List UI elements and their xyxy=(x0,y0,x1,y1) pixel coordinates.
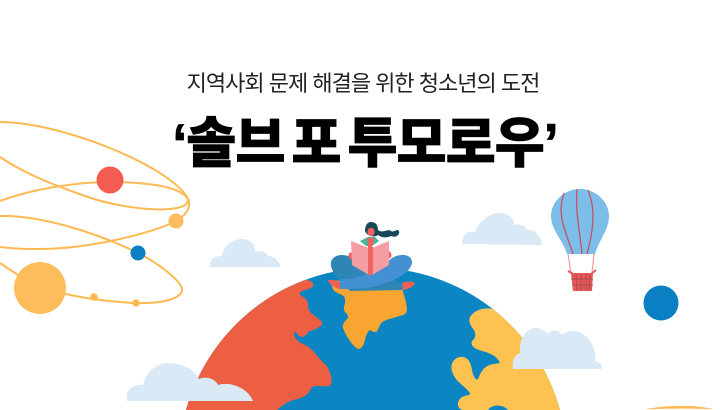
moon: left xyxy=(90,293,98,301)
book xyxy=(351,241,369,275)
balloon envelope xyxy=(551,189,609,254)
planet: red xyxy=(96,166,124,194)
feet xyxy=(328,280,340,289)
cloud: on globe left xyxy=(127,363,253,401)
balloon basket xyxy=(571,273,593,291)
circle: blue right xyxy=(644,286,678,320)
continent: orange xyxy=(332,280,407,349)
balloon ropes and gap xyxy=(569,254,593,272)
orbits and planets xyxy=(0,122,189,314)
hair xyxy=(365,222,399,237)
continent: yellow xyxy=(451,308,560,410)
hot air balloon xyxy=(551,189,609,291)
reading girl xyxy=(328,222,415,291)
title: ‘솔브 포 투모로우’ xyxy=(172,113,558,174)
cloud: upper right xyxy=(462,213,542,245)
cloud: middle left xyxy=(210,239,280,267)
globe xyxy=(186,270,560,410)
left leg xyxy=(331,255,402,291)
face xyxy=(367,228,375,236)
planet: small yellow xyxy=(168,214,184,228)
subtitle: 지역사회 문제 해결을 위한 청소년의 도전 xyxy=(187,71,539,96)
planet: large yellow xyxy=(14,262,66,314)
continent: red xyxy=(186,280,332,410)
planet: blue xyxy=(130,246,146,260)
moon: right xyxy=(132,299,140,307)
top xyxy=(360,237,379,246)
orbit: bottom right xyxy=(647,406,712,409)
right leg xyxy=(340,255,412,289)
hands xyxy=(348,252,354,260)
cloud: on globe right xyxy=(513,328,602,369)
